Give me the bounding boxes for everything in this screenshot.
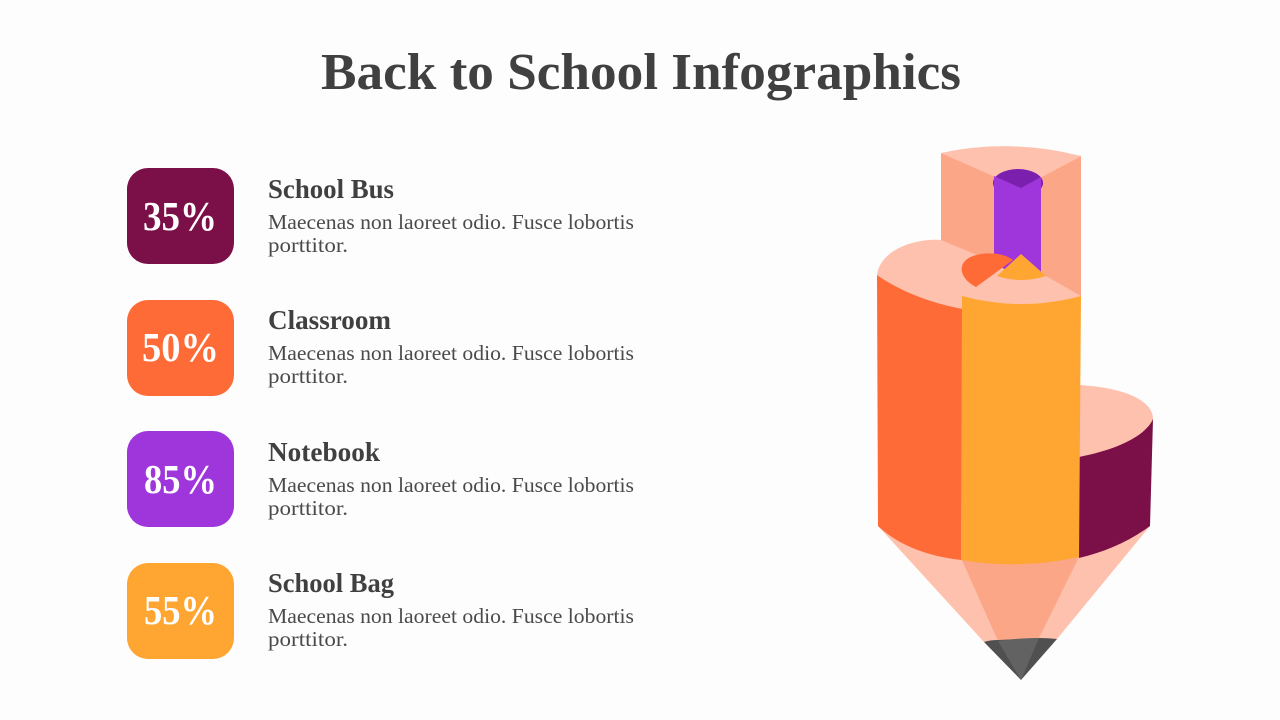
description: Classroom — [268, 341, 634, 388]
maroon segment — [1079, 419, 1153, 558]
description: Classroom: porttitor. — [268, 364, 348, 388]
item: Classroom — [127, 300, 634, 396]
yellow segment — [961, 296, 1081, 564]
description: School Bus: Maecenas non laoreet odio. Fusce lobortis — [268, 210, 634, 234]
badge: 55% — [127, 563, 234, 659]
purple core top — [993, 169, 1043, 197]
wood cone: centre facet — [961, 553, 1081, 641]
title: Back to School Infographics — [321, 44, 961, 101]
description: School Bus: porttitor. — [268, 233, 348, 257]
badge: 85%: 85% — [144, 456, 217, 502]
description: School Bag — [268, 604, 634, 651]
orange segment — [877, 275, 963, 560]
back section: walls — [941, 153, 1081, 300]
yellow core slice — [997, 254, 1046, 280]
badge: 35% — [127, 168, 234, 264]
badge: 50%: 50% — [142, 324, 219, 370]
wood cone — [878, 526, 1150, 642]
item: School Bag — [127, 563, 634, 659]
badge: 85% — [127, 431, 234, 527]
description: Notebook: porttitor. — [268, 496, 348, 520]
pencil lead — [984, 638, 1057, 680]
lead: centre facet — [998, 638, 1039, 680]
purple core body — [994, 176, 1041, 275]
description: Notebook — [268, 473, 634, 520]
item: School Bus — [127, 168, 634, 264]
heading: Notebook: Notebook — [268, 437, 380, 467]
description: Notebook: Maecenas non laoreet odio. Fusce lobortis — [268, 473, 634, 497]
description: Classroom: Maecenas non laoreet odio. Fusce lobortis — [268, 341, 634, 365]
badge: 50% — [127, 300, 234, 396]
pencil illustration — [877, 146, 1153, 680]
item: Notebook — [127, 431, 634, 527]
description: School Bus — [268, 210, 634, 257]
back section: top cap — [941, 146, 1081, 188]
heading: School Bag: School Bag — [268, 568, 394, 598]
orange core slice — [962, 253, 1013, 287]
description: School Bag: porttitor. — [268, 627, 348, 651]
badge: 55%: 55% — [144, 587, 217, 633]
wood disc: lower right — [1078, 385, 1153, 458]
heading: School Bus: School Bus — [268, 174, 394, 204]
heading: Classroom: Classroom — [268, 305, 391, 335]
wood disc: upper level — [877, 240, 1081, 309]
badge: 35%: 35% — [143, 193, 217, 239]
description: School Bag: Maecenas non laoreet odio. Fusce lobortis — [268, 604, 634, 628]
